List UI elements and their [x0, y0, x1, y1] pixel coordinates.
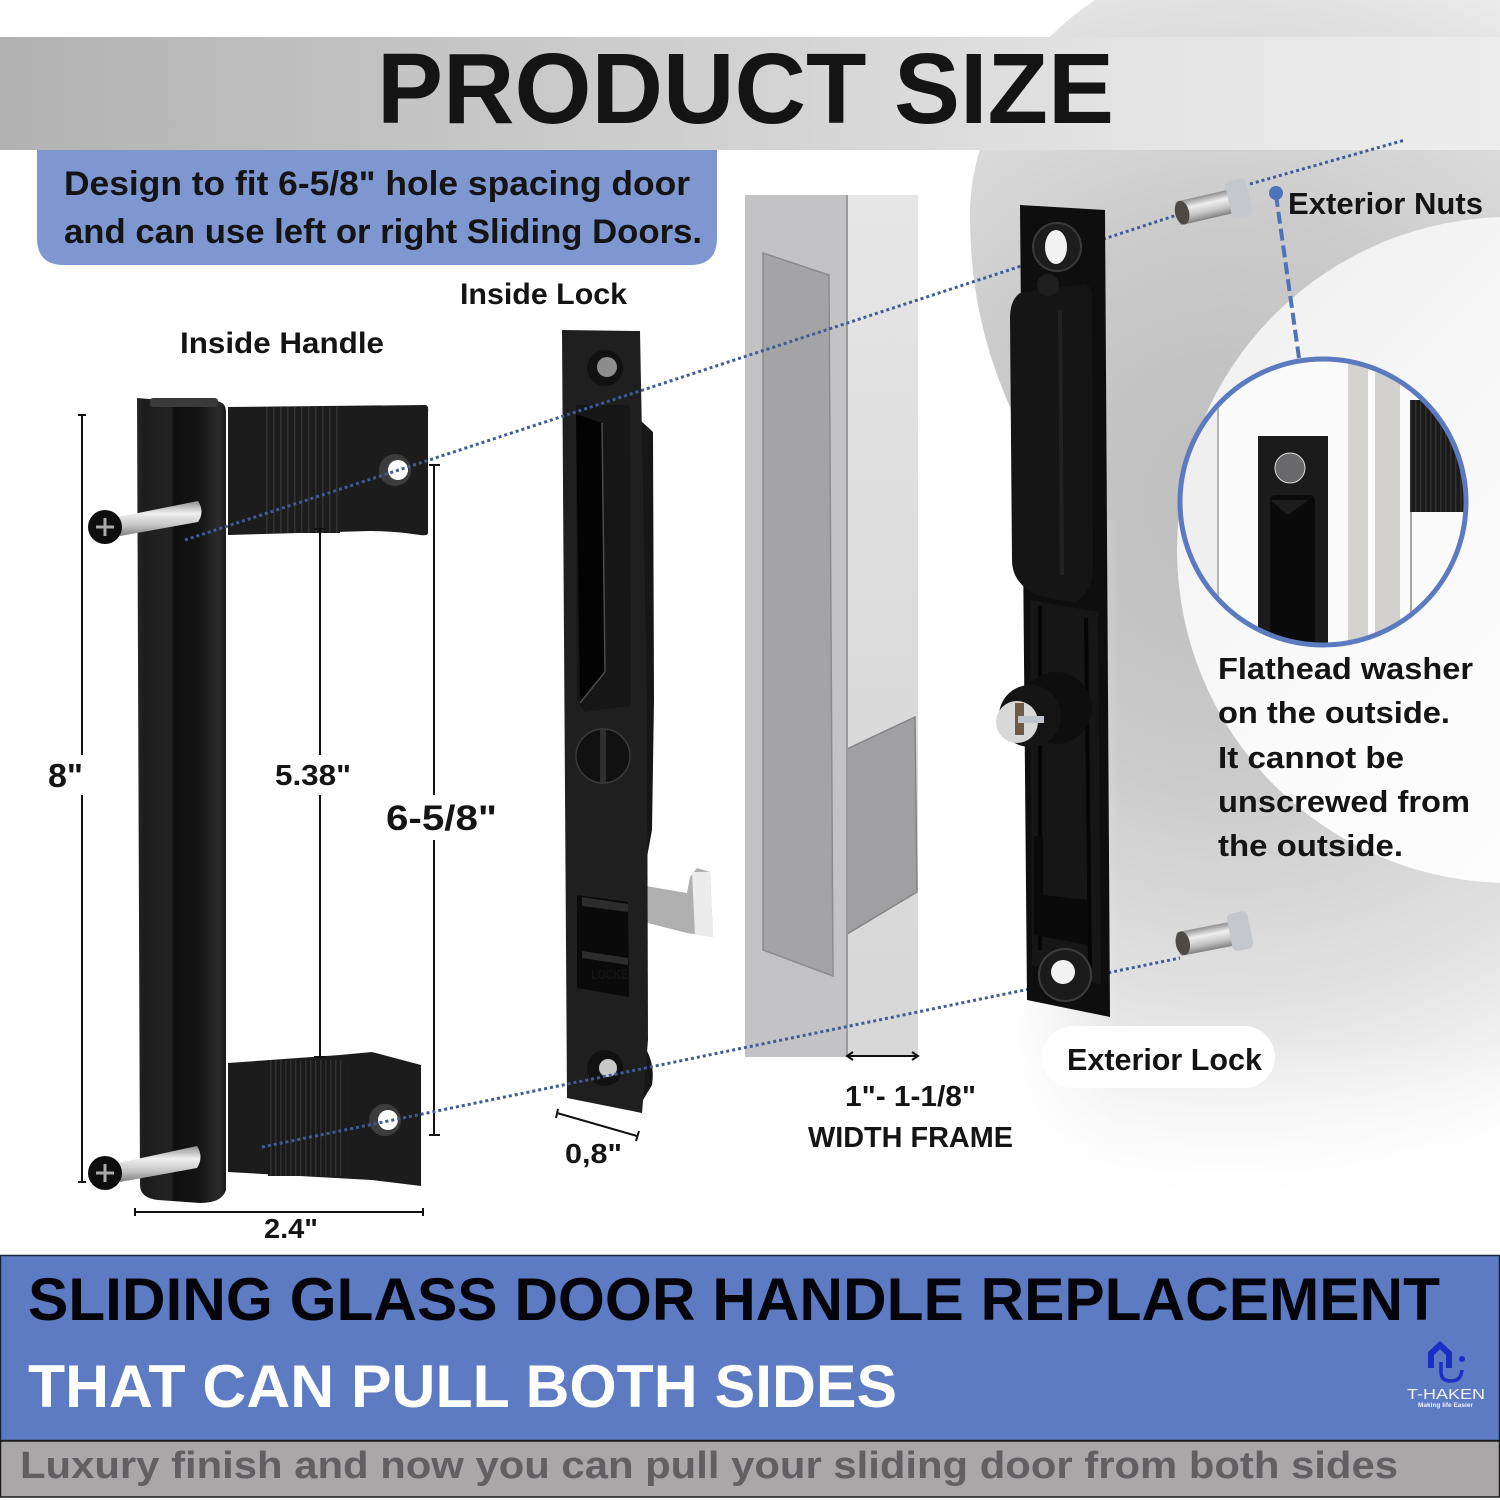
dimension: 0,8 inch	[556, 1109, 639, 1169]
dimension: 8 inch height: 8"	[48, 757, 83, 794]
side bumps	[640, 420, 654, 868]
banner heading line 2: THAT CAN PULL BOTH SIDES	[28, 1353, 897, 1420]
dimension: 6-5/8 inch	[384, 465, 500, 1135]
inside lock product	[562, 330, 713, 1113]
text: flathead washer note: on the outside.	[1218, 695, 1450, 730]
dimension: 2.4 inch width: 2.4"	[264, 1213, 318, 1244]
bottom banner	[0, 1256, 1500, 1440]
text: flathead washer note: unscrewed from	[1218, 784, 1470, 819]
hook latch	[640, 868, 713, 937]
dimension: frame width: WIDTH FRAME	[808, 1122, 1013, 1154]
icon: bottom exterior nut	[1172, 910, 1254, 962]
raised handle cup	[1010, 284, 1093, 603]
label: exterior lock	[1042, 1026, 1275, 1088]
locker window	[577, 895, 629, 997]
magnified detail circle	[1180, 350, 1466, 666]
pull recess	[576, 405, 631, 712]
title: PRODUCT SIZE	[377, 33, 1114, 145]
banner heading line 1: SLIDING GLASS DOOR HANDLE REPLACEMENT	[28, 1266, 1440, 1333]
dimension: frame width: 1"- 1-1/8"	[845, 1081, 976, 1113]
logo: T-HAKEN: Making life Easier	[1418, 1403, 1474, 1409]
callout: hole spacing: and can use left or right Sliding Doors.	[64, 213, 702, 251]
dimension: 5.38 inch: 5.38"	[275, 760, 351, 792]
dimension: 2.4 inch width	[135, 1208, 423, 1244]
dimension: frame width	[808, 1052, 1013, 1154]
callout dashed connector	[1269, 186, 1299, 358]
label: exterior nuts: Exterior Nuts	[1288, 186, 1483, 221]
logo: T-HAKEN: T-HAKEN	[1407, 1386, 1485, 1403]
label: exterior lock: Exterior Lock	[1067, 1042, 1263, 1077]
text: flathead washer note: It cannot be	[1218, 740, 1404, 775]
inside handle product	[88, 398, 428, 1203]
callout: hole spacing	[37, 150, 717, 265]
text: flathead washer note: the outside.	[1218, 828, 1403, 863]
bottom tagline strip	[0, 1441, 1500, 1497]
dimension: 0,8 inch: 0,8"	[565, 1138, 622, 1169]
icon: lower screw	[88, 1146, 200, 1190]
exterior lock product	[996, 205, 1110, 1017]
text: flathead washer note: Flathead washer	[1218, 651, 1473, 686]
label: inside handle: Inside Handle	[180, 327, 384, 360]
bottom tagline strip: Luxury finish and now you can pull your sliding door from both sides	[20, 1445, 1398, 1487]
key cylinder	[1020, 672, 1092, 744]
logo: T-HAKEN	[1407, 1341, 1485, 1409]
door frame cross-section	[745, 195, 918, 1057]
title band	[0, 33, 1500, 150]
inside lock product: LOCKE	[591, 966, 628, 982]
callout: hole spacing: Design to fit 6-5/8" hole spacing door	[64, 165, 690, 203]
dimension: 6-5/8 inch: 6-5/8"	[386, 799, 497, 838]
dimension: 5.38 inch	[272, 529, 354, 1057]
dimension: 8 inch height	[46, 415, 94, 1182]
icon: top exterior nut	[1171, 178, 1253, 232]
icon: upper screw	[88, 501, 202, 544]
dotted guide lines	[185, 140, 1405, 1147]
text: flathead washer note	[1218, 651, 1473, 863]
label: inside lock: Inside Lock	[460, 278, 627, 311]
lower channel	[1030, 600, 1101, 985]
thumb knob	[576, 729, 630, 783]
